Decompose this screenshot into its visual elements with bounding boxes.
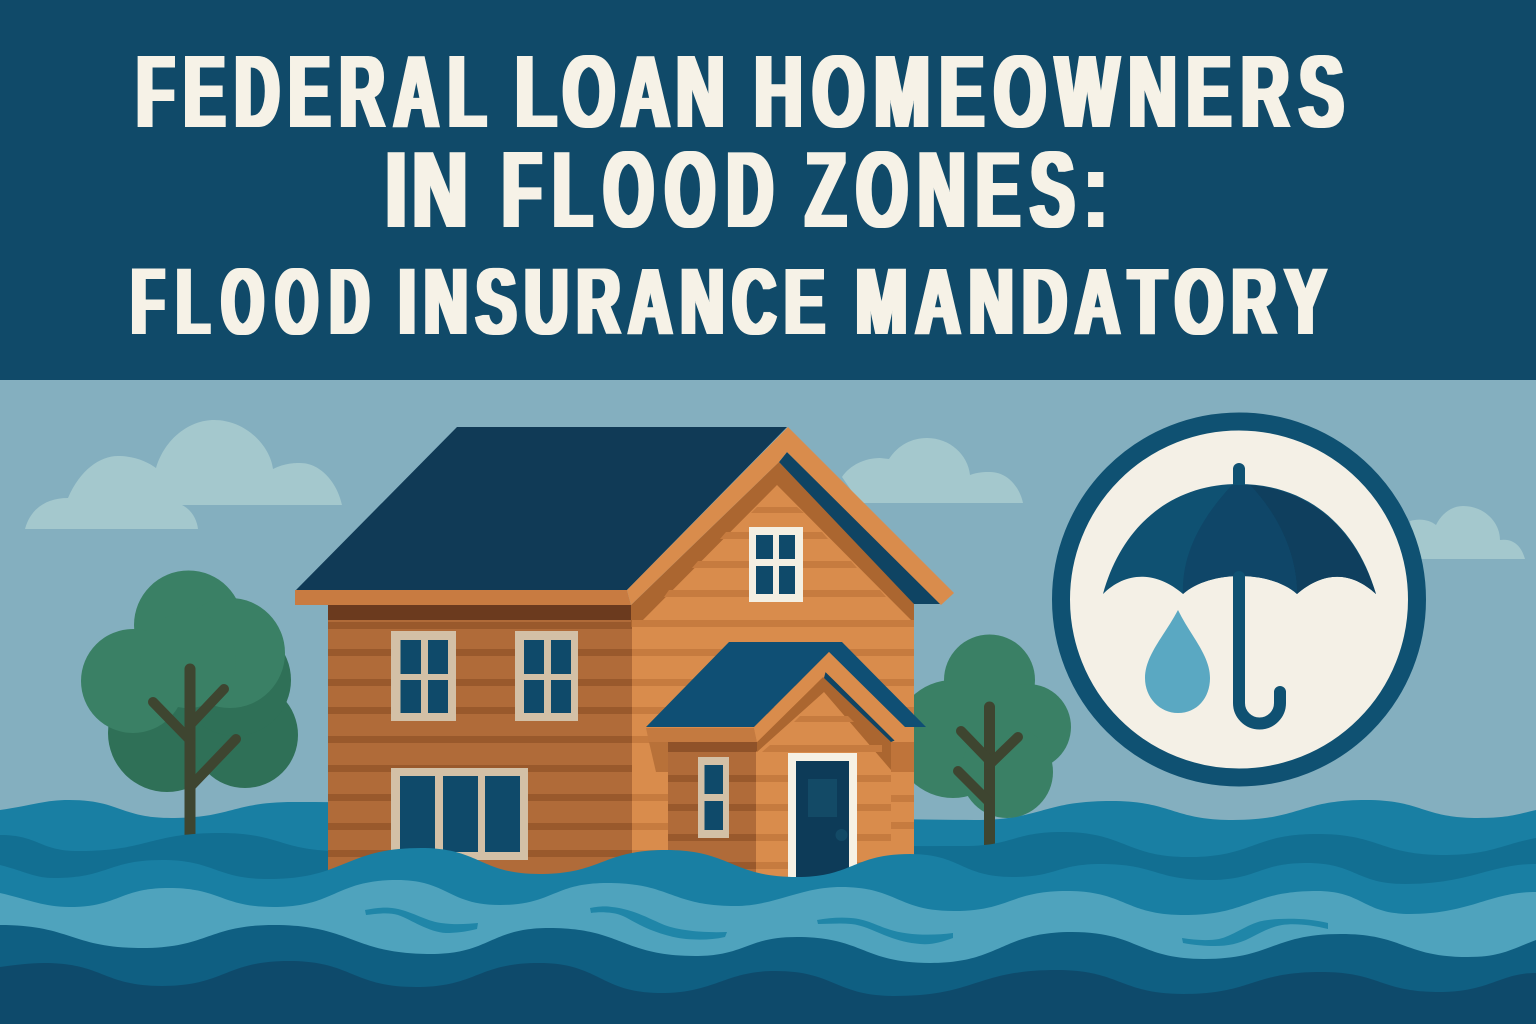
left wall <box>328 605 632 885</box>
left tree <box>81 570 298 840</box>
title line 3: MANDATORY <box>856 249 1326 354</box>
water drop <box>1145 610 1210 713</box>
title line 1 <box>136 34 1344 150</box>
porch eave <box>646 728 757 742</box>
title line 3: FLOOD <box>131 249 369 355</box>
front water wave <box>0 848 1536 1024</box>
gable trim <box>627 427 954 605</box>
title line 2 <box>385 128 1107 251</box>
title line 1: LOAN <box>516 35 724 150</box>
roof <box>296 427 787 590</box>
upper left window <box>391 631 456 721</box>
light water wave <box>0 880 1536 1024</box>
cloud: behind house <box>842 438 1023 503</box>
porch gable navy strip <box>824 672 896 742</box>
water ripples <box>365 906 1328 946</box>
lower window <box>391 768 528 860</box>
porch front wall <box>756 677 914 885</box>
title banner <box>0 0 1536 380</box>
roof eave <box>295 590 631 605</box>
title line 1: FEDERAL <box>136 34 486 149</box>
umbrella badge <box>1061 422 1417 778</box>
porch roof <box>646 642 926 727</box>
small porch window <box>698 757 729 838</box>
title line 2: IN <box>385 129 467 250</box>
deep water wave <box>0 925 1536 1024</box>
cloud: right <box>1410 506 1525 559</box>
left tree trunk <box>153 669 236 840</box>
cloud: upper left <box>25 420 342 529</box>
upper right window <box>515 631 578 721</box>
title line 2: ZONES: <box>806 129 1107 251</box>
sky background <box>0 380 1536 1024</box>
gable navy strip <box>779 452 941 604</box>
deepest water wave <box>0 961 1536 1024</box>
title line 1: HOMEOWNERS <box>755 35 1344 150</box>
mid water wave <box>0 832 1536 1024</box>
title line 3: INSURANCE <box>399 248 824 354</box>
gable window <box>749 527 803 602</box>
door <box>788 753 857 888</box>
right tree <box>894 634 1071 848</box>
back water wave <box>0 800 1536 1024</box>
porch recessed wall <box>649 742 758 882</box>
porch gable trim <box>754 652 914 742</box>
right tree trunk <box>958 707 1018 848</box>
right gable wall <box>631 462 914 885</box>
umbrella <box>1103 469 1376 724</box>
house <box>295 427 954 888</box>
title line 3 <box>131 248 1326 355</box>
title line 2: FLOOD <box>502 128 773 250</box>
